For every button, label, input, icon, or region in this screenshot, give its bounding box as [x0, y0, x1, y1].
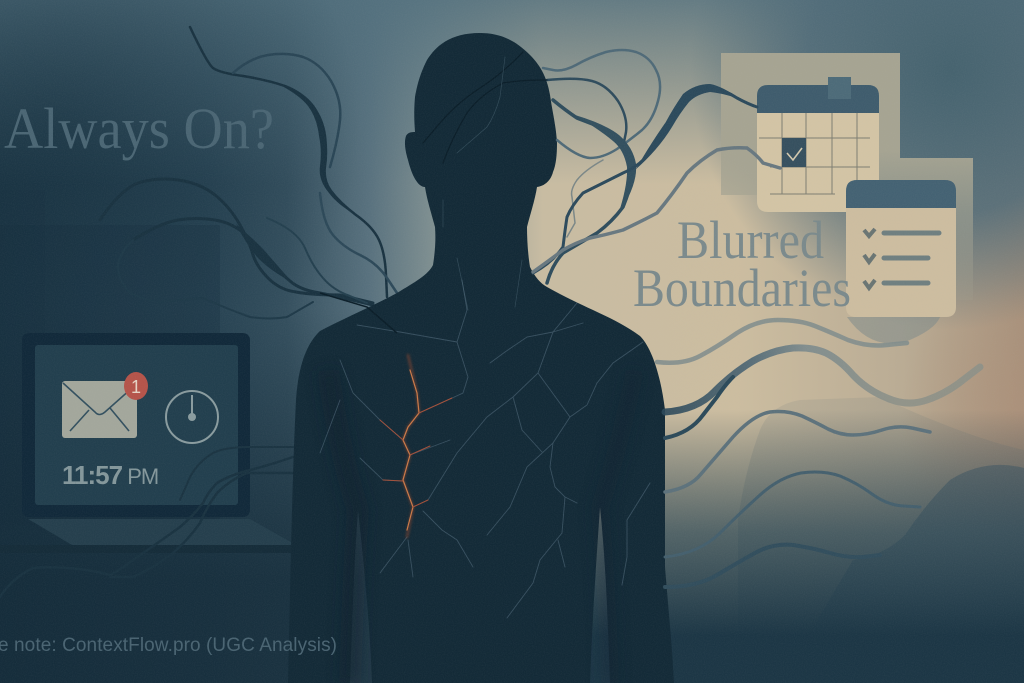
icon: envelope: [62, 381, 137, 438]
strand overlapping the shoulder: [320, 293, 397, 333]
icon: clock: [166, 391, 218, 443]
laptop base: [28, 519, 296, 545]
strands: flowing from the head to the right: [533, 50, 780, 283]
heading: Blurred Boundaries: Boundaries: [633, 258, 851, 318]
strands: left side: [0, 27, 397, 597]
laptop with notification: [0, 333, 300, 549]
icon: checklist: [846, 180, 956, 317]
strands: right flowing waves: [657, 320, 980, 587]
heading: Always On?: Always On?: [4, 96, 274, 161]
badge: one notification: 1: [131, 377, 141, 397]
background panel: left doorway shapes: [0, 190, 220, 530]
heading: Blurred Boundaries: [633, 210, 851, 318]
body cracks: grey: [320, 280, 650, 618]
badge: one notification: [124, 372, 148, 400]
heading: Blurred Boundaries: Blurred: [677, 210, 824, 270]
person silhouette: [288, 33, 674, 683]
body cracks: glowing red: [380, 355, 452, 537]
timestamp: 11:57 PM: [62, 460, 158, 490]
cracks on the head: [423, 52, 547, 310]
left floor shade: [0, 0, 420, 683]
icon: calendar: [757, 77, 879, 212]
document panels behind calendar: [721, 53, 973, 300]
laptop screen: [22, 333, 250, 517]
wave layers: right side: [560, 0, 1024, 683]
source note: e note: ContextFlow.pro (UGC Analysis): [0, 635, 337, 656]
